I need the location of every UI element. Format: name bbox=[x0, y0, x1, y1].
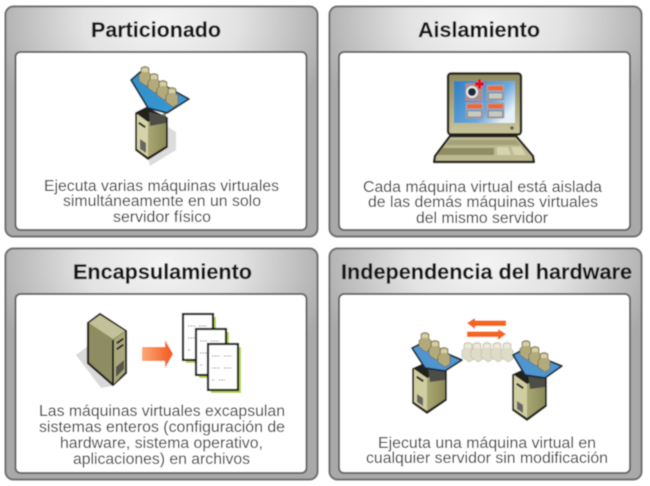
description: Ejecuta varias máquinas virtuales bbox=[44, 178, 279, 195]
description bbox=[39, 403, 285, 468]
migrating virtual machines bbox=[462, 342, 513, 362]
panel frame bbox=[330, 6, 642, 236]
description: simultáneamente en un solo bbox=[63, 193, 261, 210]
panel frame bbox=[6, 248, 318, 480]
arrow bbox=[142, 340, 173, 368]
icon: source server bbox=[412, 332, 462, 413]
description: hardware, sistema operativo, bbox=[60, 435, 263, 452]
arrow: left bbox=[467, 318, 506, 329]
content box bbox=[16, 294, 306, 473]
icon: laptop with isolated virtual machines bbox=[434, 74, 534, 162]
heading: Particionado bbox=[91, 18, 221, 42]
arrow: right bbox=[467, 329, 506, 340]
icon: target server bbox=[513, 340, 562, 420]
description: de las demás máquinas virtuales bbox=[368, 194, 598, 211]
description: sistemas enteros (configuración de bbox=[39, 419, 285, 436]
panel: Independencia del hardware bbox=[330, 248, 642, 480]
description: Ejecuta una máquina virtual en bbox=[378, 435, 596, 452]
description: servidor físico bbox=[113, 209, 211, 226]
description bbox=[363, 179, 602, 227]
description: cualquier servidor sin modificación bbox=[366, 450, 608, 467]
panel: Encapsulamiento bbox=[6, 248, 318, 480]
description: Cada máquina virtual está aislada bbox=[363, 179, 602, 196]
panel frame bbox=[330, 248, 642, 480]
content box bbox=[339, 294, 630, 473]
content box bbox=[16, 52, 306, 230]
heading: Aislamiento bbox=[418, 18, 540, 42]
icon: server with virtual machines bbox=[131, 66, 189, 166]
icon: physical server bbox=[76, 314, 126, 388]
heading: Independencia del hardware bbox=[341, 260, 632, 284]
description bbox=[366, 435, 608, 467]
icon: stack of files bbox=[183, 314, 241, 393]
description: del mismo servidor bbox=[416, 210, 548, 227]
description bbox=[44, 178, 279, 226]
content box bbox=[339, 52, 630, 230]
heading: Encapsulamiento bbox=[73, 260, 252, 284]
panel frame bbox=[6, 6, 318, 236]
description: Las máquinas virtuales excapsulan bbox=[39, 403, 285, 420]
description: aplicaciones) en archivos bbox=[73, 451, 250, 468]
panel: Particionado bbox=[6, 6, 318, 236]
panel: Aislamiento bbox=[330, 6, 642, 236]
